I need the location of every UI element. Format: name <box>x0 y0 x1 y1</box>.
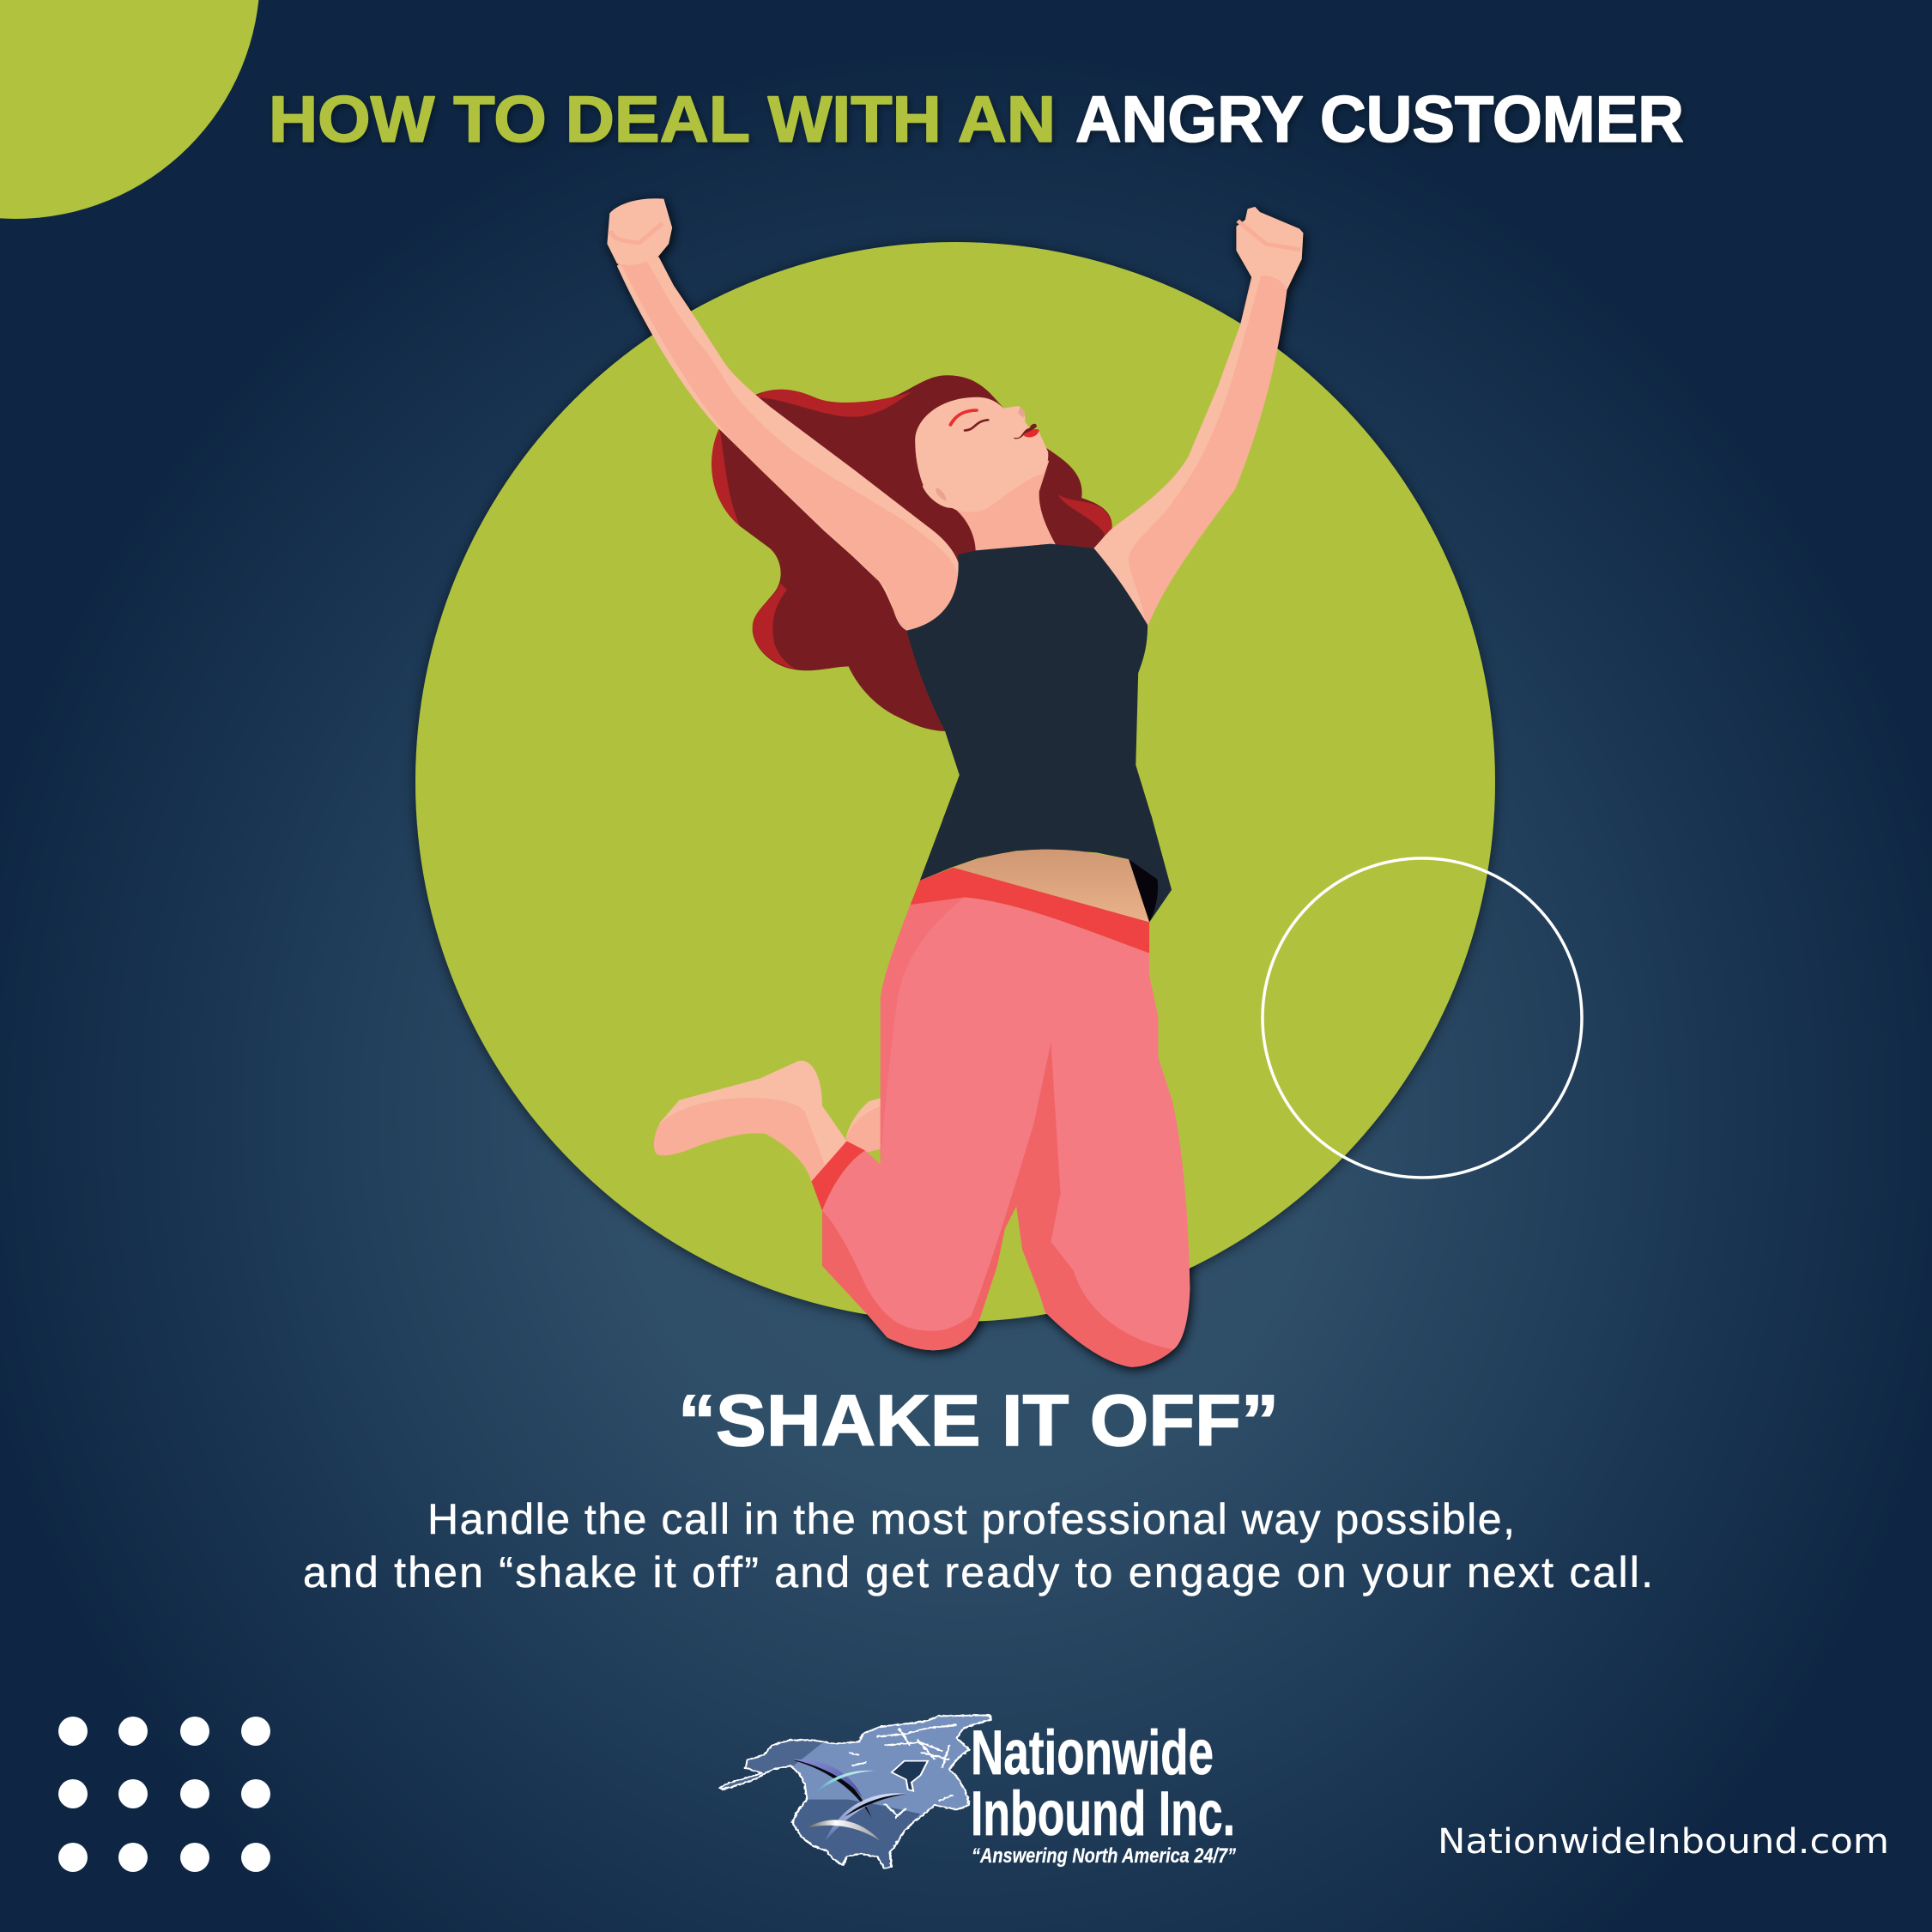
logo wordmark <box>971 1718 1236 1868</box>
crop top lower part <box>920 815 1172 922</box>
ankle cuff <box>811 1141 865 1211</box>
pants <box>822 897 1190 1367</box>
midriff <box>954 850 1149 922</box>
logo wordmark: “Answering North America 24/7” <box>972 1844 1236 1868</box>
white outline circle <box>1263 858 1582 1178</box>
crop top upper part <box>906 544 1153 820</box>
body text: and then “shake it off” and get ready to engage on your next call. <box>303 1548 1653 1596</box>
pants shading <box>881 897 965 1165</box>
upper body: hair, arms, head, top <box>607 198 1303 820</box>
back foot <box>846 1098 882 1152</box>
lips <box>1014 424 1039 439</box>
neck <box>952 457 1057 553</box>
figure shadow on background <box>607 198 1303 1367</box>
title: ANGRY CUSTOMER <box>1075 83 1684 156</box>
eyebrow <box>950 410 977 425</box>
closed eye <box>965 420 988 431</box>
waistband <box>911 868 1149 953</box>
body text <box>303 1495 1653 1596</box>
logo wordmark: Nationwide <box>971 1718 1214 1788</box>
nose shade <box>1018 407 1025 418</box>
large green circle <box>415 242 1495 1322</box>
website url: NationwideInbound.com <box>1438 1822 1889 1862</box>
logo wordmark: Inbound Inc. <box>971 1779 1235 1849</box>
face <box>915 397 1048 512</box>
company logo <box>720 1715 1236 1868</box>
title: HOW TO DEAL WITH AN <box>269 83 1056 156</box>
title <box>269 83 1684 156</box>
left arm and fist <box>607 198 960 631</box>
lower body: legs and feet <box>654 815 1190 1367</box>
front foot <box>654 1061 847 1181</box>
corner quarter circle <box>0 0 260 219</box>
logo map of North America <box>720 1715 991 1868</box>
body text: Handle the call in the most professional way possible, <box>427 1495 1515 1543</box>
top inner shadow <box>1129 859 1158 922</box>
decorative dot grid <box>58 1717 270 1872</box>
hair <box>712 375 1112 731</box>
pants fold shading <box>822 1043 1173 1367</box>
illustration: jumping woman <box>607 198 1303 1367</box>
heading: shake it off: “SHAKE IT OFF” <box>678 1380 1279 1461</box>
right arm and fist <box>1094 207 1303 636</box>
ear <box>923 483 952 508</box>
